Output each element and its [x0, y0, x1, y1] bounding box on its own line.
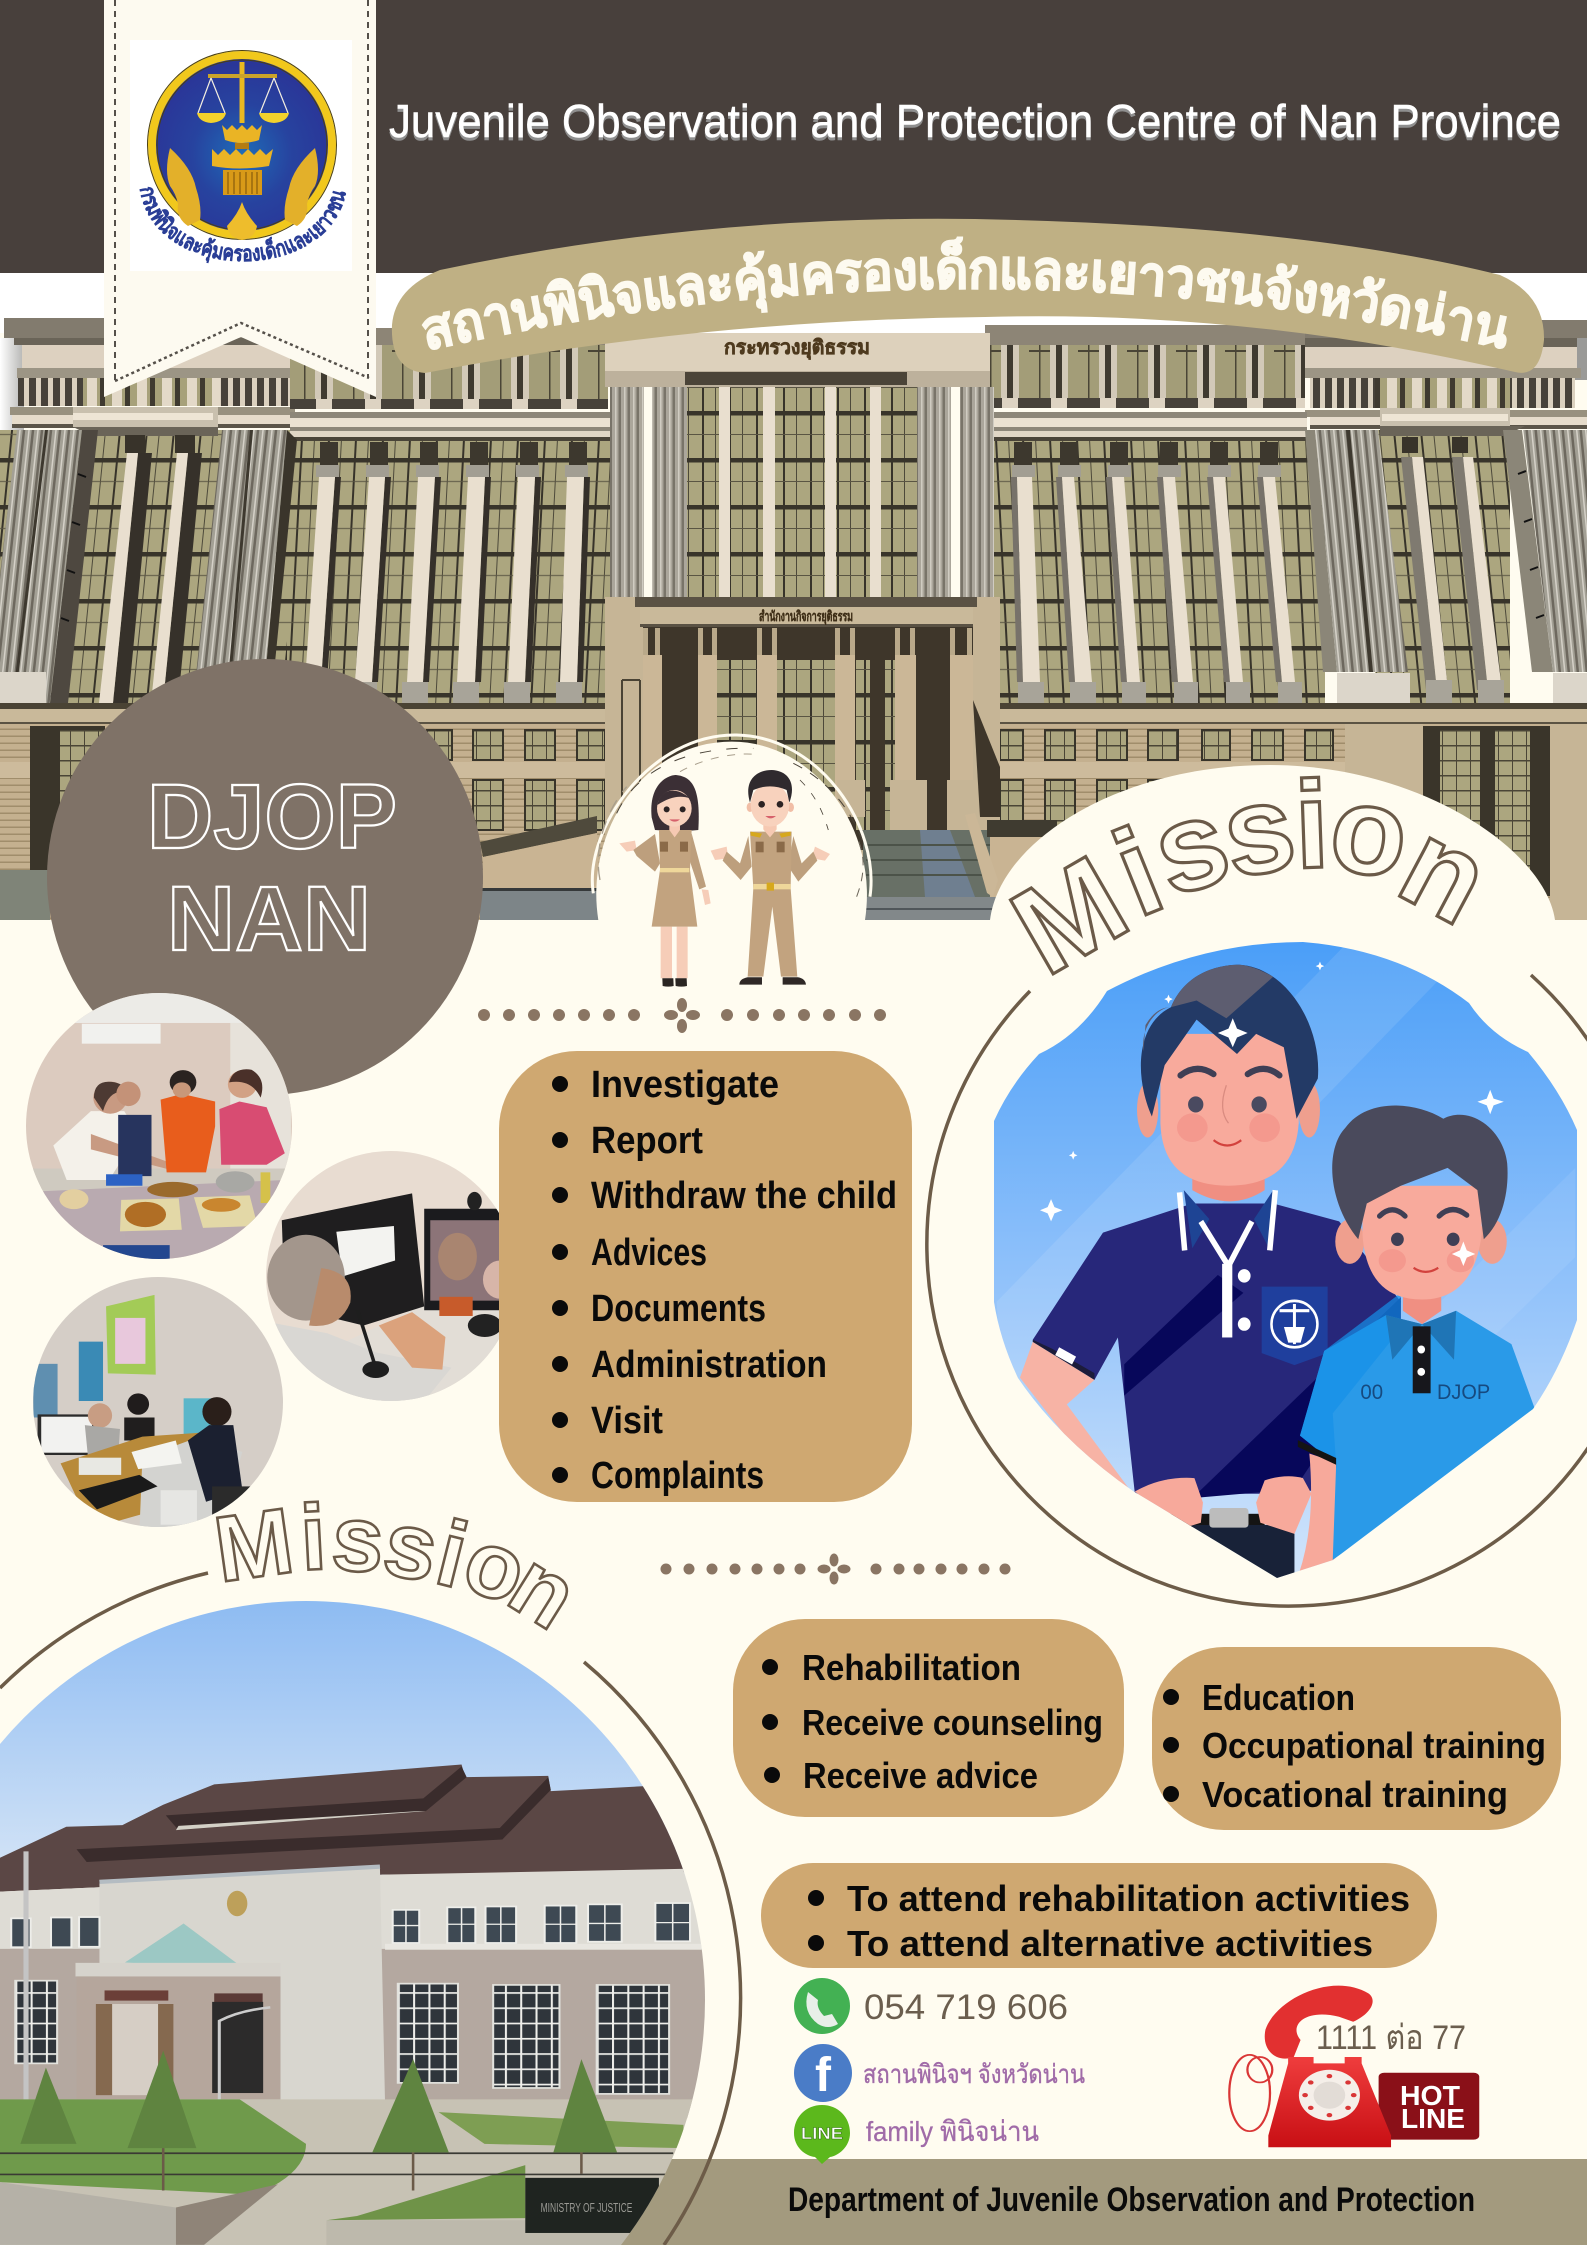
- panel: training list: Vocational training: [1202, 1774, 1508, 1815]
- text: LINE group: family พินิจน่าน: [866, 2116, 1039, 2147]
- duty items: Report: [591, 1120, 703, 1162]
- cream lower background: [0, 920, 1587, 2245]
- panel: rehabilitation list: Receive counseling: [802, 1702, 1103, 1743]
- man shirt: [1033, 1204, 1401, 1494]
- panel: activities list: To attend alternative activities: [847, 1923, 1373, 1964]
- icon: hotline telephone: LINE: [1401, 2103, 1465, 2134]
- text: facebook page: สถานพินิจฯ จังหวัดน่าน: [863, 2059, 1085, 2089]
- stairs and ramps: [0, 813, 1075, 920]
- DJOP NAN circle: DJOP: [147, 766, 397, 868]
- logo: DJOP emblem: กรมพินิจและคุ้มครองเด็กและเยาวชน: [140, 186, 346, 264]
- duty items: Advices: [591, 1232, 707, 1274]
- curved Thai title banner: สถานพินิจและคุ้มครองเด็กและเยาวชนจังหวัดน่าน: [422, 236, 1507, 350]
- duty items: [591, 1064, 897, 1497]
- central pediment: [605, 333, 990, 387]
- man arm: [1020, 1342, 1128, 1488]
- left-middle top: [290, 328, 610, 441]
- panel: activities list: [761, 1863, 1437, 1968]
- fluted columns: [0, 387, 1587, 703]
- light pilasters: center: [719, 387, 881, 600]
- icon: phone: [794, 1978, 850, 2034]
- building edge shadows: [0, 338, 1587, 668]
- panel: training list: Education: [1202, 1677, 1355, 1718]
- man belt and hands: [1163, 1514, 1265, 1527]
- icon: hotline telephone: HOT: [1400, 2080, 1460, 2111]
- dot divider 2: [660, 1554, 1010, 1584]
- light pilasters: left middle: [300, 442, 590, 703]
- boy shirt labels: [1361, 1384, 1490, 1399]
- icon: LINE: [794, 2105, 850, 2164]
- title: English centre name: Juvenile Observation and Protection Centre of Nan Province: [389, 95, 1561, 147]
- photo: cooking activity: [26, 993, 292, 1259]
- illustration: officer and boy in polo shirts: [990, 940, 1587, 1583]
- photo: office counselling: [33, 1277, 283, 1527]
- light pilasters: right middle: [1011, 442, 1302, 703]
- title: English centre name: Juvenile Observation and Protection Centre of Nan Province: [389, 98, 1561, 150]
- boy arm: [1299, 1454, 1336, 1574]
- light pilasters: left wing: [99, 435, 202, 703]
- man officer: [711, 770, 830, 985]
- shirt pocket badge: [1262, 1287, 1328, 1365]
- ribbon with logo: [104, 0, 376, 397]
- sparkles: [1040, 962, 1504, 1266]
- duty items: Complaints: [591, 1455, 764, 1497]
- footer band: [0, 2159, 1587, 2245]
- man collar: [1184, 1190, 1273, 1248]
- woman officer: [619, 775, 711, 987]
- portico: [605, 597, 1000, 860]
- brush circle: [592, 735, 871, 920]
- right-middle top: [985, 325, 1307, 441]
- photo: Nan centre building: [0, 1601, 705, 2245]
- right wing top: [1296, 320, 1587, 436]
- boy shirt labels: 00: [1360, 1381, 1383, 1404]
- panel: training list: Occupational training: [1202, 1725, 1546, 1766]
- panel: rehabilitation list: Rehabilitation: [802, 1647, 1021, 1688]
- icon: facebook: f: [815, 2049, 832, 2102]
- header band: [0, 0, 1587, 333]
- duty items: Administration: [591, 1344, 827, 1386]
- pedestals: [0, 672, 1587, 704]
- panel: rehabilitation list: Receive advice: [803, 1755, 1038, 1796]
- photo: video call: [266, 1151, 499, 1401]
- ministry building illustration: [0, 318, 1587, 920]
- photo: Nan centre building: MINISTRY OF JUSTICE: [541, 2200, 632, 2214]
- panel: duties list: [499, 1051, 912, 1502]
- panel: rehabilitation list: [733, 1619, 1124, 1817]
- duty items: Withdraw the child: [591, 1175, 897, 1217]
- icon: facebook: [794, 2044, 852, 2102]
- duty items: Documents: [591, 1288, 766, 1330]
- DJOP NAN circle: NAN: [167, 868, 371, 970]
- panel: training list: [1152, 1647, 1561, 1830]
- ring around boys illustration: [927, 975, 1587, 1606]
- light pilasters: right wing: [1401, 437, 1504, 703]
- boy shirt: [1300, 1311, 1535, 1560]
- icon: LINE: LINE: [801, 2124, 843, 2143]
- DJOP NAN circle: [47, 659, 483, 1095]
- duty items: Investigate: [591, 1064, 779, 1106]
- dot divider 1: [478, 998, 886, 1033]
- logo white plate: [130, 40, 352, 271]
- ring around centre building: [0, 1573, 741, 2245]
- cream blob behind top Mission: [990, 765, 1555, 1000]
- boy shirt labels: DJOP: [1437, 1381, 1490, 1404]
- heading: Mission lower: Mission: [208, 1485, 596, 1649]
- logo: DJOP emblem: [140, 50, 346, 264]
- man neck and head: [1192, 1179, 1265, 1202]
- boy head: [1335, 1219, 1364, 1264]
- panel: activities list: To attend rehabilitation activities: [847, 1878, 1410, 1919]
- heading: Mission top: Mission: [990, 756, 1511, 1001]
- window walls: [0, 387, 1510, 705]
- man hair: [1141, 965, 1318, 1119]
- text: phone number: 054 719 606: [864, 1988, 1068, 2027]
- icon: hotline telephone: [1229, 1986, 1479, 2147]
- left wing top: [4, 318, 295, 436]
- lower floors: [0, 703, 1587, 920]
- central pediment: กระทรวงยุติธรรม: [724, 337, 870, 360]
- duty bullets: [552, 1076, 568, 1483]
- duty items: Visit: [591, 1400, 663, 1442]
- illustration: officers in brush circle: [592, 735, 871, 987]
- text: hotline number: 1111 ต่อ 77: [1316, 2019, 1466, 2057]
- portico: สำนักงานกิจการยุติธรรม: [759, 608, 853, 625]
